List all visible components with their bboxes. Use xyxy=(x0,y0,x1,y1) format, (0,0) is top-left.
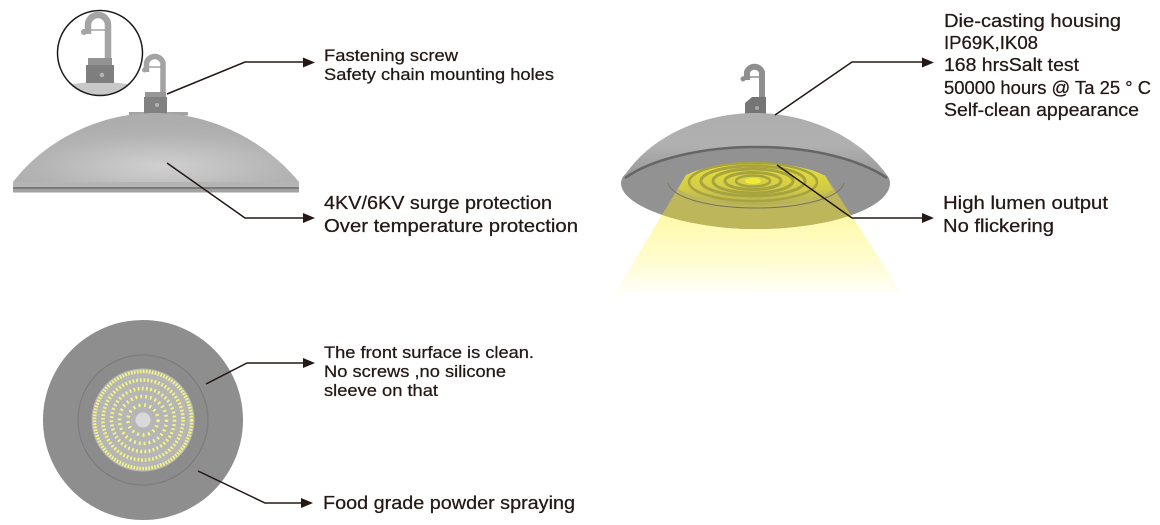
lamp: side view xyxy=(13,57,299,192)
lower disc xyxy=(621,147,890,229)
dome xyxy=(623,113,889,178)
text: surge protection xyxy=(324,193,578,236)
arrow: lumen output xyxy=(777,165,934,223)
text: lumen output xyxy=(943,193,1108,236)
LED rings xyxy=(94,372,192,468)
center cap xyxy=(136,412,150,428)
LED board xyxy=(92,368,194,472)
text: lumen output: No flickering xyxy=(943,216,1054,236)
flush ring xyxy=(668,183,844,208)
arrow: front surface xyxy=(206,358,315,384)
lens with rings xyxy=(678,163,833,205)
arrow: housing xyxy=(775,58,934,115)
text: lumen output: High lumen output xyxy=(943,193,1108,213)
text: housing specifications: 50000 hours @ Ta 25 ° C xyxy=(944,78,1151,98)
text: front surface: No screws ,no silicone xyxy=(324,362,506,381)
light beam xyxy=(612,175,905,298)
lamp: underside view xyxy=(621,64,890,229)
arrow: powder spraying xyxy=(198,471,313,508)
text: front surface: sleeve on that xyxy=(324,381,438,400)
text: fastening screw: Fastening screw xyxy=(324,46,459,65)
text: housing specifications: IP69K,IK08 xyxy=(944,33,1038,53)
text: fastening screw xyxy=(324,46,554,84)
text: front surface xyxy=(324,343,534,400)
arrow: surge protection xyxy=(167,163,315,223)
inner ring xyxy=(78,355,208,485)
icon: hook xyxy=(740,67,762,98)
inset: hook detail xyxy=(56,10,144,96)
arrow: fastening screw xyxy=(167,58,315,94)
rim band xyxy=(625,147,887,178)
icon: bracket xyxy=(745,97,766,115)
text: housing specifications: Die-casting housing xyxy=(944,11,1121,31)
text: surge protection: 4KV/6KV surge protection xyxy=(324,193,552,213)
text: surge protection: Over temperature protection xyxy=(324,216,578,236)
text: housing specifications xyxy=(944,11,1151,120)
icon: hook xyxy=(142,57,163,93)
light on disc xyxy=(662,175,852,229)
text: fastening screw: Safety chain mounting holes xyxy=(324,65,554,84)
base rim xyxy=(13,182,299,192)
outer disc xyxy=(43,320,243,520)
text: front surface: The front surface is clean. xyxy=(324,343,534,362)
text: housing specifications: Self-clean appearance xyxy=(944,100,1139,120)
dome xyxy=(13,113,299,182)
text: powder spraying: Food grade powder spraying xyxy=(323,493,575,513)
icon: bracket xyxy=(129,92,188,116)
lamp: front view xyxy=(43,320,243,520)
text: housing specifications: 168 hrsSalt test xyxy=(944,55,1079,75)
